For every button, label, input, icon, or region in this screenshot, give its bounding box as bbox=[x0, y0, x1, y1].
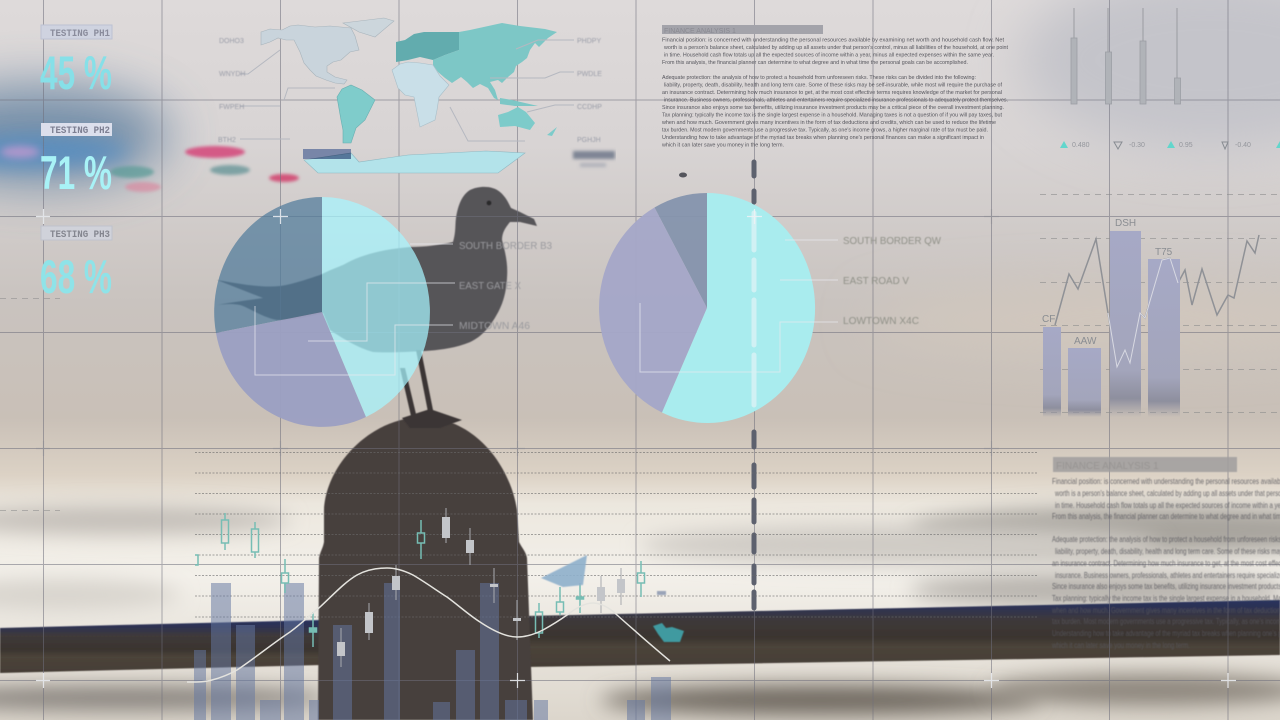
map: antarctica bbox=[304, 151, 525, 173]
slice: cyan bbox=[322, 197, 430, 417]
map: europe and russia bbox=[396, 32, 459, 62]
slice: lavender bbox=[599, 208, 707, 412]
map: north america bbox=[261, 25, 359, 84]
badge: testing ph1 bbox=[41, 25, 112, 40]
bar labels: DSH bbox=[1115, 218, 1136, 229]
article: top text block: Tax planning: typically the income tax is the single largest expense in a household. Managing taxes is not a question of if you will pay taxes, but bbox=[662, 112, 1002, 118]
map labels: PGHJH bbox=[577, 137, 601, 144]
bar labels: AAW bbox=[1074, 336, 1097, 347]
badge: testing ph2: TESTING PH2 bbox=[50, 125, 110, 137]
map: south america bbox=[337, 85, 375, 143]
metric: 45 percent: 45 % bbox=[40, 46, 112, 99]
bottom bar chart bbox=[194, 583, 671, 720]
map leader lines bbox=[240, 40, 574, 141]
blue blur streak at left bbox=[0, 85, 299, 192]
pie chart: right bbox=[599, 193, 942, 423]
ticker row: 0.95 bbox=[1179, 142, 1193, 149]
pie labels: SOUTH BORDER B3 bbox=[459, 241, 552, 252]
bars bbox=[1043, 231, 1180, 417]
article heading bar: FINANCE ANALYSIS 1 bbox=[1056, 461, 1159, 472]
map: australia bbox=[498, 107, 557, 136]
bar labels: T75 bbox=[1155, 247, 1173, 258]
map labels: PHDPY bbox=[577, 38, 601, 45]
badge: testing ph2 bbox=[41, 123, 112, 137]
pie labels: MIDTOWN A46 bbox=[459, 321, 530, 332]
metric: 71 percent: 71 % bbox=[40, 146, 112, 199]
blue flag shape bbox=[541, 555, 587, 587]
article: top text block: worth is a person's balance sheet, calculated by adding up all assets under that person's control, minus all liabilities of the household, at one point bbox=[663, 45, 1008, 51]
article heading bar: FINANCE ANALYSIS 1 bbox=[664, 28, 736, 35]
bar labels bbox=[1042, 218, 1173, 347]
pie leader lines bbox=[640, 240, 838, 372]
teal smudge bbox=[653, 623, 684, 642]
article: top text block: which it can later save you money in the long term. bbox=[661, 142, 784, 148]
slice: cyan bbox=[662, 193, 815, 423]
bar labels: CF bbox=[1042, 314, 1055, 325]
pie labels bbox=[459, 241, 552, 332]
ticker row: -0.40 bbox=[1235, 142, 1251, 149]
article: top text block: Financial position: is concerned with understanding the personal resources available by examining net worth and household cash flow. Net bbox=[662, 38, 1004, 44]
pie leader lines bbox=[255, 244, 455, 375]
slice: slate blue bbox=[214, 197, 322, 333]
article: top text block: Adequate protection: the analysis of how to protect a household from unforeseen risks. These risks can be divided into the following: bbox=[662, 75, 976, 81]
map labels: BTH2 bbox=[218, 137, 236, 144]
pie labels: EAST GATE X bbox=[459, 281, 521, 292]
dashed vertical marker bbox=[679, 162, 754, 608]
pie labels: LOWTOWN X4C bbox=[843, 316, 919, 327]
pie chart: left bbox=[214, 197, 552, 427]
badge: testing ph1: TESTING PH1 bbox=[50, 28, 110, 40]
ticker row: -0.30 bbox=[1129, 142, 1145, 149]
chart: right bar and line chart bbox=[1040, 194, 1280, 417]
article: top text block: Understanding how to take advantage of the myriad tax breaks when planning one's personal finances can make a significant impact in bbox=[662, 135, 984, 141]
line series over bars bbox=[1108, 258, 1178, 367]
article: top text block: in time. Household cash flow totals up all the expected sources of income within a year, minus all expected expenses within the same year. bbox=[664, 52, 994, 58]
candlesticks: teal outlined bbox=[195, 513, 644, 647]
bottom chart dotted guides bbox=[195, 452, 1037, 617]
badge: testing ph3: TESTING PH3 bbox=[50, 229, 110, 241]
dashed gridlines bbox=[1040, 194, 1280, 412]
ticker row bbox=[1060, 141, 1280, 149]
article: top text block: an insurance contract. Determining how much insurance to get, at the most cost effective terms requires knowledge of the market for personal bbox=[662, 90, 1002, 96]
map labels: PWDLE bbox=[577, 71, 602, 78]
pie labels bbox=[843, 236, 942, 327]
article: top text block bbox=[661, 25, 1008, 148]
slice: lavender bbox=[216, 312, 366, 427]
panel: testing percentages bbox=[40, 25, 112, 303]
photo: railing left bbox=[0, 620, 322, 673]
map labels: FWPEH bbox=[219, 104, 244, 111]
map labels bbox=[218, 38, 602, 144]
pie labels: SOUTH BORDER QW bbox=[843, 236, 942, 247]
metric: 68 percent: 68 % bbox=[40, 250, 112, 303]
article: top text block: tax burden. Most modern governments use a progressive tax. Typically, as one's income grows, a higher marginal rate of tax must be paid. bbox=[662, 128, 988, 134]
article: top text block: Since insurance also enjoys some tax benefits, utilizing insurance investment products may be a critical piece of the overall investment planning. bbox=[662, 105, 1004, 111]
map: dark legend block bbox=[303, 149, 351, 159]
map: blurred legend bars bbox=[573, 151, 615, 167]
article: top text block: From this analysis, the financial planner can determine to what degree and in what time the personal goals can be accomplished. bbox=[662, 60, 968, 66]
small blurred tag bbox=[657, 591, 666, 595]
badge: testing ph3 bbox=[41, 226, 112, 241]
article: lower text block: which it can later save you money in the long term. bbox=[1051, 640, 1190, 650]
pie labels: EAST ROAD V bbox=[843, 276, 909, 287]
article heading bar bbox=[662, 25, 823, 35]
crosshair markers bbox=[36, 209, 1236, 688]
article: top text block: liability, property, death, disability, health and long term care. Some of these risks may be self-insurable, while most will require the purchase of bbox=[664, 82, 1002, 88]
map: asia bbox=[433, 23, 557, 106]
photo: seagull bbox=[217, 187, 537, 428]
ticker row: 0.480 bbox=[1072, 142, 1090, 149]
article heading bar bbox=[1053, 457, 1237, 472]
article: lower text block bbox=[1051, 457, 1280, 650]
line series bbox=[1055, 235, 1259, 367]
slice: slate bbox=[654, 193, 707, 308]
chart: top right candlesticks bbox=[1071, 8, 1180, 104]
left dashed ticks bbox=[0, 298, 60, 510]
map labels: CCDHP bbox=[577, 104, 602, 111]
map labels: WNYDH bbox=[219, 71, 245, 78]
article: top text block: when and how much. Government gives many incentives in the form of tax deductions and credits, which can be used to reduce the lifetime bbox=[661, 120, 996, 126]
map labels: DOHO3 bbox=[219, 38, 244, 45]
world map bbox=[218, 18, 615, 173]
curve line bbox=[187, 568, 670, 682]
candlesticks: grey filled bbox=[337, 508, 625, 667]
photo: stone post with dome bbox=[318, 417, 533, 720]
map: africa bbox=[392, 62, 449, 127]
photo: railing right bbox=[525, 600, 1280, 667]
article: top text block: insurance. Business owners, professionals, athletes and entertainers require specialized insurance professionals to adequately protect themselves. bbox=[664, 98, 1008, 104]
map: greenland bbox=[343, 18, 394, 37]
